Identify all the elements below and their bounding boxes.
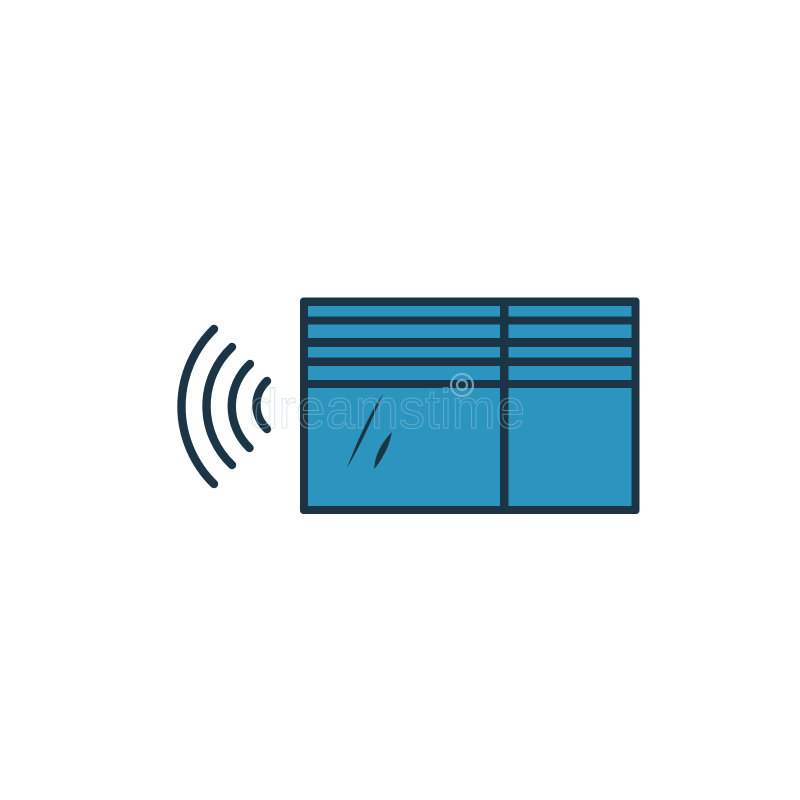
left glass pane (308, 388, 500, 506)
watermark wordmark: dreamstime (249, 377, 525, 440)
watermark spiral logo (451, 374, 473, 396)
icon: window with blinds (300, 298, 640, 514)
right glass pane (508, 388, 632, 506)
window frame (300, 298, 640, 514)
glass reflection marks (347, 394, 392, 469)
icon: wireless signal arcs (181, 329, 267, 484)
right blind slats (508, 306, 632, 380)
left blind slats (308, 306, 500, 380)
watermark (249, 374, 525, 440)
